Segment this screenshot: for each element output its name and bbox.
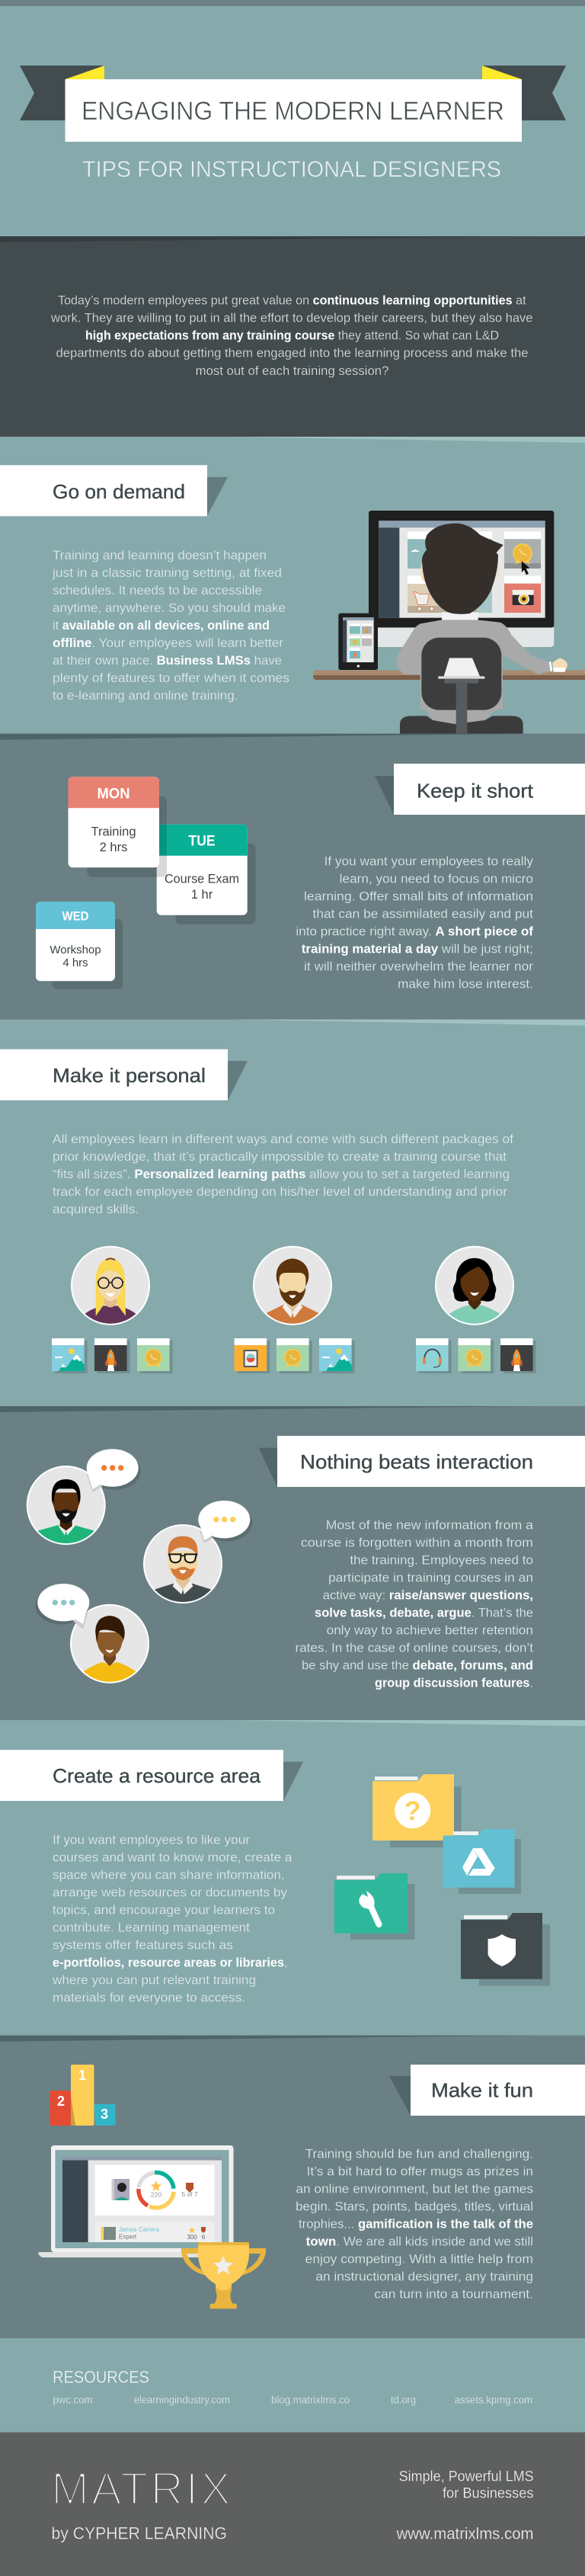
podium: ranks 1 2 3: 2	[57, 2094, 65, 2109]
text: go on demand: just in a classic training setting, at fixed	[52, 566, 282, 580]
card: Tuesday	[157, 825, 256, 924]
footer tagline and url: Simple, Powerful LMS	[399, 2469, 534, 2485]
footer logo: MATRIX	[51, 2463, 231, 2514]
text: make it personal: acquired skills.	[53, 1202, 139, 1216]
donut score chart	[139, 2171, 174, 2208]
laptop with gamification dashboard: 6	[202, 2234, 206, 2241]
text: create a resource area: materials for everyone to access.	[53, 1990, 245, 2004]
text: nothing beats interaction: rates. In the case of online courses, don’t	[295, 1640, 533, 1655]
footer logo	[51, 2463, 231, 2543]
card: Wednesday: WED	[62, 909, 88, 924]
title ribbon	[20, 66, 566, 142]
heading: Keep it short: Keep it short	[417, 780, 534, 803]
card: Tuesday: TUE	[189, 834, 215, 850]
text: nothing beats interaction: participate in training courses in an	[328, 1570, 533, 1584]
intro paragraph: work. They are willing to put in all the effort to develop their careers, but they also have	[50, 311, 532, 325]
resources: RESOURCES	[53, 2368, 149, 2387]
text: nothing beats interaction: only way to achieve better retention	[327, 1623, 533, 1637]
avatar: woman with curly dark hair	[435, 1246, 514, 1326]
text: create a resource area: If you want employees to like your	[53, 1832, 250, 1847]
heading: Nothing beats interaction	[259, 1436, 585, 1487]
text: make it fun	[296, 2146, 533, 2301]
folder: yellow question mark: ?	[404, 1796, 420, 1826]
text: make it personal: All employees learn in different ways and come with such different packages of	[53, 1132, 513, 1146]
heading: Make it personal: Make it personal	[53, 1064, 206, 1087]
text: create a resource area: where you can put relevant training	[52, 1972, 256, 1987]
text: keep it short	[296, 854, 534, 992]
monitor	[369, 511, 554, 647]
text: go on demand: anytime, anywhere. So you should make	[53, 601, 286, 615]
text: make it fun: begin. Stars, points, badges, titles, virtual	[296, 2199, 533, 2213]
intro paragraph: departments do about getting them engaged into the learning process and make the	[56, 347, 529, 360]
footer tagline and url: www.matrixlms.com	[396, 2526, 533, 2543]
title text: ENGAGING THE MODERN LEARNER	[82, 97, 504, 126]
learning path icons: second learner	[235, 1338, 355, 1373]
podium: ranks 1 2 3: 3	[101, 2107, 108, 2122]
laptop with gamification dashboard: James Carrera	[119, 2226, 159, 2233]
text: make it personal: track for each employee depending on his/her level of understanding and prior	[53, 1184, 507, 1199]
text: create a resource area: systems offer features such as	[53, 1937, 233, 1952]
avatar: bearded man	[253, 1246, 332, 1326]
folder: dark shield	[461, 1913, 550, 1986]
podium: ranks 1 2 3: 1	[78, 2068, 86, 2083]
text: go on demand	[52, 548, 289, 703]
footer tagline and url	[396, 2469, 534, 2543]
text: nothing beats interaction: the training. Employees need to	[350, 1552, 533, 1567]
text: nothing beats interaction: solve tasks, debate, argue. That’s the	[315, 1605, 533, 1620]
resources: assets.kpmg.com	[455, 2394, 532, 2405]
text: create a resource area: e-portfolios, resource areas or libraries,	[53, 1955, 288, 1969]
speech bubble: teal dots	[35, 1584, 89, 1629]
folder: yellow question mark	[372, 1774, 462, 1847]
resources: pwc.com	[53, 2394, 93, 2405]
learning path icons: first learner	[52, 1338, 173, 1373]
card: Wednesday: 4 hrs	[62, 956, 88, 969]
text: create a resource area: contribute. Learning management	[53, 1920, 250, 1934]
text: nothing beats interaction: group discussion features.	[375, 1675, 533, 1690]
learning path icons: third learner	[416, 1338, 536, 1373]
intro paragraph: most out of each training session?	[196, 364, 388, 378]
heading: Make it fun	[389, 2065, 585, 2116]
laptop with gamification dashboard	[38, 2145, 233, 2257]
text: create a resource area: space where you can share information,	[53, 1867, 285, 1882]
intro paragraph: Today’s modern employees put great value on continuous learning opportunities at	[58, 293, 526, 307]
text: make it fun: town. We are all kids inside and we still	[306, 2234, 533, 2248]
resources: td.org	[391, 2394, 416, 2405]
text: go on demand: at their own pace. Business LMSs have	[53, 653, 282, 668]
desk	[313, 670, 585, 680]
speech bubble: yellow dots	[198, 1501, 252, 1543]
person	[397, 524, 567, 724]
text: make it personal: prior knowledge, that it’s practically impossible to create a training course that	[53, 1149, 507, 1164]
laptop with gamification dashboard: 220	[151, 2191, 161, 2199]
resources: blog.matrixlms.co	[271, 2394, 350, 2405]
heading: Create a resource area: Create a resource area	[53, 1764, 261, 1787]
resources: elearningindustry.com	[134, 2394, 230, 2405]
avatar: blonde woman with glasses	[71, 1246, 150, 1326]
podium: ranks 1 2 3	[50, 2065, 116, 2126]
avatar: red-haired man with glasses	[143, 1524, 222, 1604]
text: nothing beats interaction: active way: raise/answer questions,	[323, 1588, 533, 1602]
text: keep it short: that can be assimilated easily and put	[312, 907, 533, 921]
schedule cards	[36, 777, 256, 989]
heading: Go on demand: Go on demand	[53, 480, 185, 503]
text: go on demand: to e-learning and online training.	[53, 688, 238, 703]
text: create a resource area	[52, 1832, 292, 2004]
intro paragraph	[50, 293, 532, 378]
card: Monday	[69, 777, 167, 877]
text: nothing beats interaction	[295, 1517, 534, 1690]
heading: Make it personal	[0, 1049, 248, 1101]
intro paragraph: high expectations from any training course they attend. So what can L&D	[85, 328, 499, 342]
text: nothing beats interaction: Most of the new information from a	[326, 1517, 534, 1532]
text: go on demand: schedules. It needs to be accessible	[53, 583, 262, 598]
laptop with gamification dashboard: 5 of 7	[181, 2190, 198, 2198]
illustration: person at desktop computer with tablet	[313, 511, 585, 734]
laptop with gamification dashboard: 300	[187, 2234, 197, 2241]
text: keep it short: make him lose interest.	[398, 977, 533, 992]
text: nothing beats interaction: be shy and use the debate, forums, and	[302, 1658, 533, 1672]
laptop with gamification dashboard: Expert	[119, 2233, 137, 2241]
office chair	[400, 638, 523, 734]
heading: Make it fun: Make it fun	[431, 2079, 533, 2102]
text: go on demand: plenty of features to offer when it comes	[53, 671, 289, 685]
tablet	[338, 614, 378, 670]
folder icons	[334, 1774, 550, 1986]
card: Monday: Training	[91, 825, 136, 839]
text: go on demand: offline. Your employees will learn better	[53, 636, 283, 650]
card: Wednesday: Workshop	[50, 944, 101, 956]
card: Monday: MON	[98, 787, 129, 803]
card: Tuesday: Course Exam	[165, 873, 239, 886]
text: keep it short: into practice right away. A short piece of	[296, 924, 533, 939]
text: keep it short: training material a day will be just right;	[302, 942, 533, 956]
heading: Create a resource area	[0, 1750, 303, 1801]
text: nothing beats interaction: course is forgotten within a month from	[301, 1535, 533, 1549]
heading: Keep it short	[375, 764, 585, 815]
avatar: woman with short hair and yellow top	[70, 1604, 149, 1684]
text: create a resource area: arrange web resources or documents by	[53, 1885, 288, 1899]
footer logo: by CYPHER LEARNING	[52, 2524, 227, 2543]
text: create a resource area: topics, and encourage your learners to	[53, 1902, 275, 1917]
resources	[53, 2368, 532, 2405]
text: keep it short: learn, you need to focus on micro	[340, 872, 533, 886]
text: keep it short: If you want your employees to really	[324, 854, 534, 869]
folder: green wrench	[334, 1873, 414, 1940]
text: make it fun: It’s a bit hard to offer mugs as prizes in	[307, 2164, 533, 2178]
folder: blue drive icon	[443, 1829, 521, 1894]
text: make it fun: an online environment, but let the games	[296, 2181, 533, 2196]
text: keep it short: it will neither overwhelm the learner nor	[304, 960, 533, 974]
text: make it fun: Training should be fun and challenging.	[305, 2146, 533, 2161]
heading: Go on demand	[0, 465, 228, 516]
text: go on demand: it available on all devices, online and	[53, 618, 270, 633]
text: make it personal: “fits all sizes”. Personalized learning paths allow you to set a targeted learning	[53, 1167, 510, 1181]
text: make it fun: can turn into a tournament.	[374, 2286, 533, 2301]
trophy	[181, 2242, 266, 2308]
card: Tuesday: 1 hr	[191, 888, 213, 902]
footer tagline and url: for Businesses	[443, 2485, 534, 2502]
card: Monday: 2 hrs	[100, 841, 127, 854]
text: keep it short: learning. Offer small bits of information	[304, 889, 533, 904]
subtitle: TIPS FOR INSTRUCTIONAL DESIGNERS	[82, 157, 501, 182]
text: make it fun: trophies... gamification is the talk of the	[299, 2216, 533, 2231]
text: go on demand: Training and learning doesn’t happen	[53, 548, 267, 562]
speech bubble: orange dots	[86, 1449, 141, 1492]
avatar: man with green sweater	[27, 1466, 106, 1546]
card: Wednesday	[36, 902, 123, 989]
text: make it fun: an instructional designer, any training	[315, 2269, 533, 2283]
heading: Nothing beats interaction: Nothing beats interaction	[300, 1450, 533, 1473]
text: make it fun: enjoy competing. With a little help from	[305, 2251, 533, 2266]
text: create a resource area: courses and want to know more, create a	[53, 1850, 292, 1864]
text: make it personal	[53, 1132, 513, 1216]
